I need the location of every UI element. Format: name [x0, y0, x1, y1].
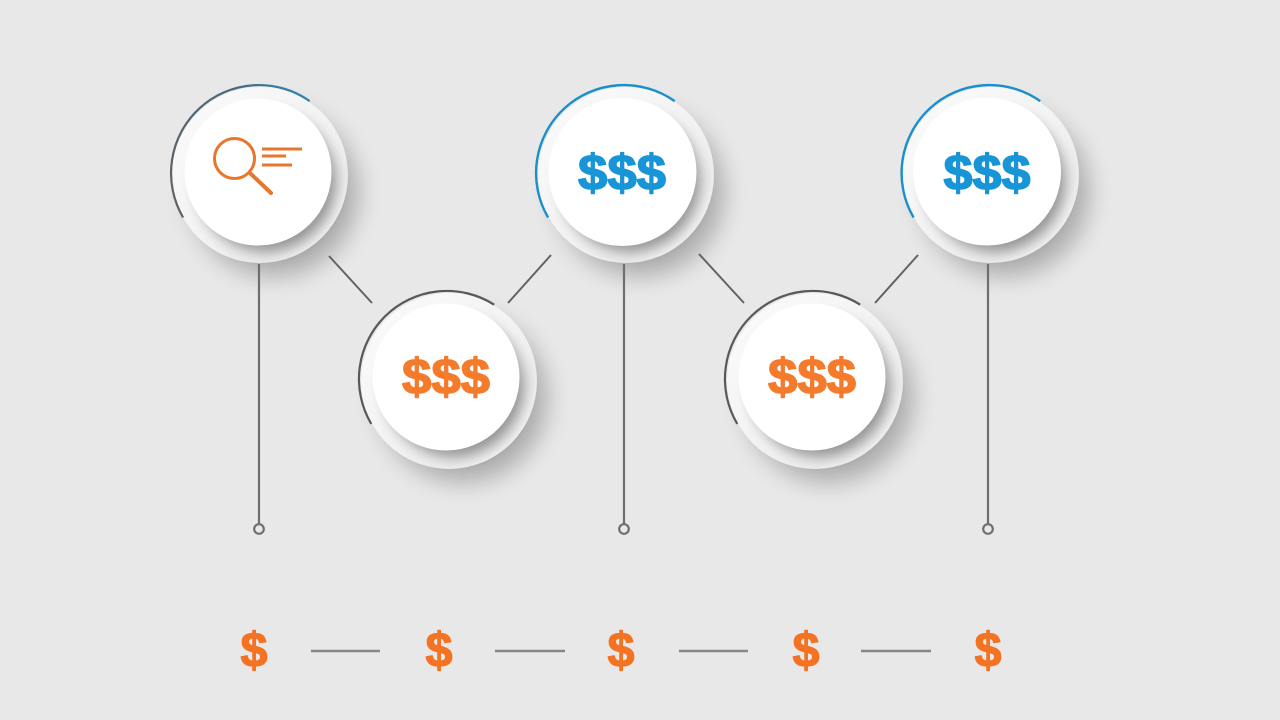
diagonal connectors: [329, 254, 918, 303]
node 1: search: [171, 85, 358, 276]
label: $$$: $$$: [944, 145, 1031, 201]
vertical stem 2: [619, 264, 629, 534]
vertical stem 3: [983, 264, 993, 534]
node 4: orange dollars: [725, 291, 913, 482]
dollar 4: $: [792, 624, 820, 678]
label: $$$: $$$: [402, 349, 490, 405]
bottom dashes: [311, 650, 931, 652]
dollar 3: $: [608, 624, 634, 678]
icon: magnifying glass with text lines: [214, 138, 302, 193]
label: $$$: $$$: [768, 349, 856, 405]
node 3: blue dollars: [536, 85, 724, 276]
vertical stem 1: [254, 264, 264, 534]
dollar 2: $: [426, 624, 452, 678]
node 5: blue dollars: [902, 85, 1089, 276]
node 2: orange dollars: [359, 291, 547, 482]
dollar 5: $: [974, 624, 1002, 678]
dollar 1: $: [240, 624, 268, 678]
label: $$$: $$$: [578, 145, 666, 201]
bottom dollar row: [240, 624, 1002, 678]
